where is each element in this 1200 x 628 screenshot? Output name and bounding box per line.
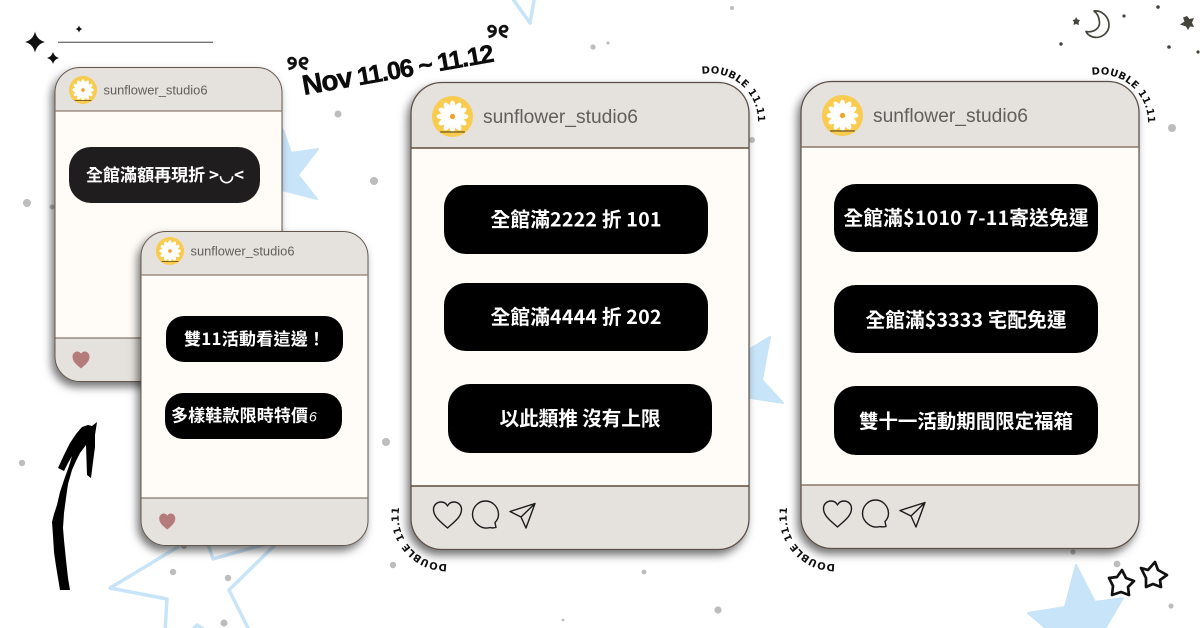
- button: spend 2222: [444, 185, 708, 254]
- button: limited lucky bag: 雙十一活動期間限定福箱: [859, 405, 1073, 434]
- arc label: DOUBLE 11.11 top right of main card: DOUBLE 11.11: [702, 66, 766, 122]
- date ornament left: ୨୧: [286, 49, 309, 76]
- username: sunflower_studio6: [873, 105, 1028, 127]
- button: store-wide discount: 全館滿額再現折 >◡<: [86, 161, 244, 186]
- icon: moon and stars: [1059, 5, 1200, 54]
- button: spend 1010: 全館滿$1010 7-11寄送免運: [844, 202, 1089, 231]
- icon: sparkles and line: [25, 26, 213, 64]
- icons: like, comment, share: [434, 501, 535, 528]
- username: sunflower_studio6: [190, 244, 294, 258]
- arc label: DOUBLE 11.11 top right of right card: DOUBLE 11.11: [1092, 67, 1156, 122]
- panel: main card, shipping and lucky bag: [801, 82, 1139, 548]
- avatar: [156, 237, 184, 265]
- date ornament right: ୨୧: [486, 17, 509, 44]
- button: no upper limit: [448, 384, 712, 453]
- button: store-wide discount: [69, 147, 260, 203]
- title: date range: Nov 11.06 ~ 11.12: [300, 37, 496, 101]
- button: limited-time shoe prices: 6: [309, 408, 317, 424]
- button: limited lucky bag: [834, 386, 1098, 455]
- icon: filled heart: [159, 513, 175, 530]
- avatar: [822, 95, 863, 136]
- button: double 11 activities: [166, 316, 343, 362]
- button: spend 3333: 全館滿$3333 宅配免運: [866, 304, 1067, 333]
- icon: filled heart: [72, 352, 90, 368]
- icons: like, comment, share: [824, 500, 925, 527]
- arc label: DOUBLE 11.11 bottom left of main card: DOUBLE 11.11: [391, 508, 446, 572]
- username: sunflower_studio6: [483, 106, 638, 128]
- panel: small card, store-wide discount: [55, 68, 282, 382]
- button: limited-time shoe prices: 多樣鞋款限時特價: [171, 402, 308, 426]
- button: no upper limit: 以此類推 沒有上限: [500, 402, 661, 432]
- icon: outlined stars: [1109, 562, 1167, 595]
- button: double 11 activities: 雙11活動看這邊！: [184, 325, 325, 350]
- button: spend 2222: 全館滿2222 折 101: [490, 204, 662, 232]
- arc label: DOUBLE 11.11 bottom left of right card: DOUBLE 11.11: [779, 508, 834, 572]
- button: spend 1010: [834, 184, 1098, 252]
- avatar: [432, 96, 473, 137]
- panel: main card, spend thresholds: [411, 82, 749, 550]
- button: spend 3333: [834, 285, 1098, 353]
- avatar: [69, 76, 97, 104]
- username: sunflower_studio6: [104, 82, 208, 98]
- panel: small card, double 11 activities: [141, 232, 368, 546]
- button: spend 4444: [444, 283, 708, 351]
- icon: hand-drawn arrow: [52, 422, 97, 590]
- button: spend 4444: 全館滿4444 折 202: [490, 301, 662, 330]
- button: limited-time shoe prices: [165, 393, 342, 439]
